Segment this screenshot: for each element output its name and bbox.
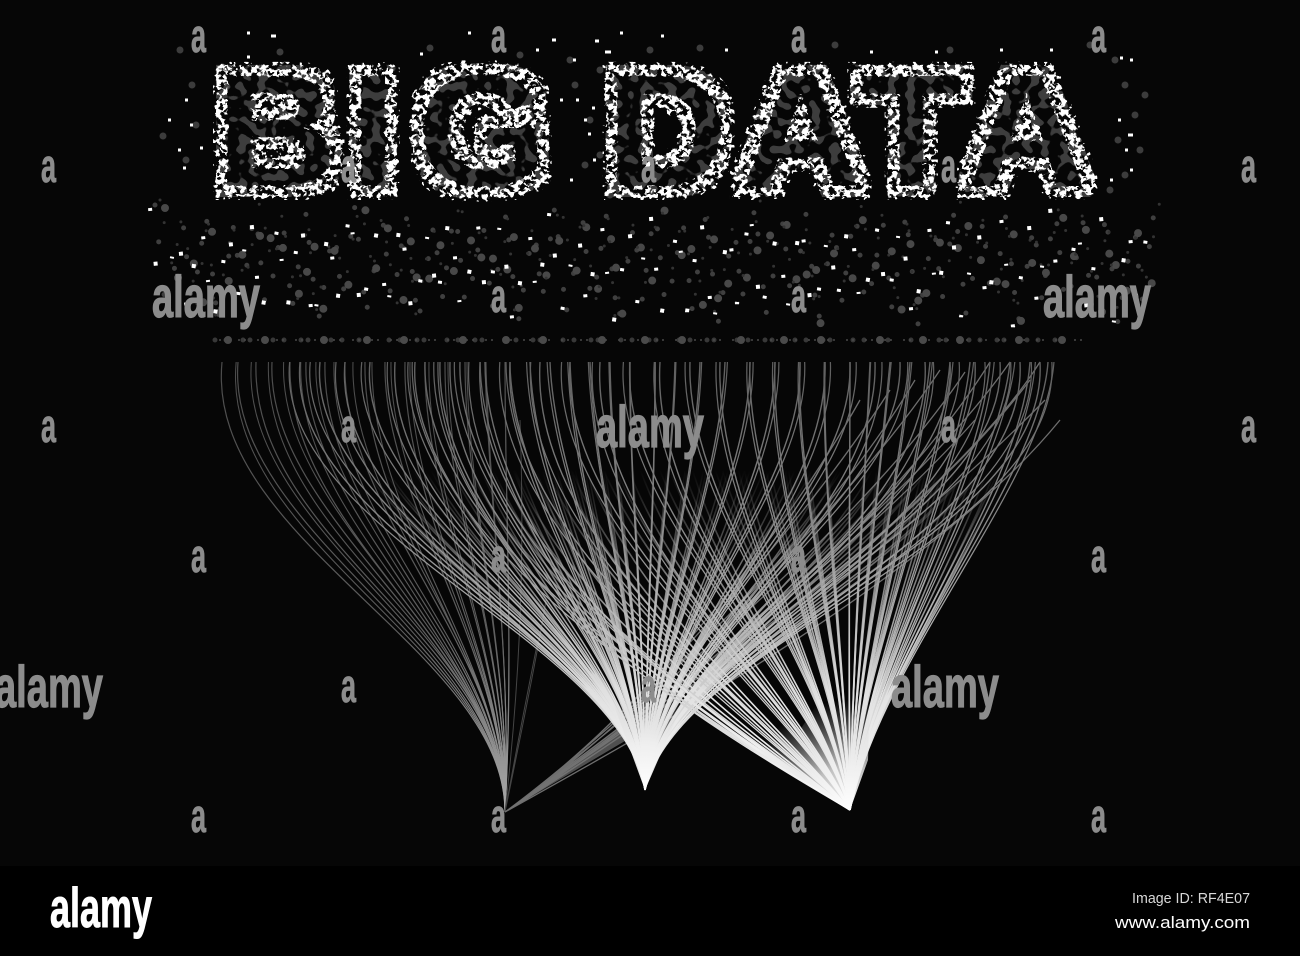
scattered white particles <box>150 33 1150 327</box>
watermark: small marks: a <box>791 269 806 322</box>
watermark: small marks: a <box>941 399 956 452</box>
watermark: small marks: a <box>791 789 806 842</box>
watermark: small marks: a <box>491 789 506 842</box>
watermark: small marks: a <box>641 659 656 712</box>
fan C: bright lower copies <box>476 478 1003 811</box>
watermark: small marks: a <box>1091 9 1106 62</box>
watermark: small marks: a <box>41 139 56 192</box>
fan C: full-height copy <box>412 362 1054 810</box>
bright tip: centre <box>618 698 680 786</box>
curve network: fibres converging to three points <box>221 362 1060 812</box>
watermark: small marks: a <box>191 529 206 582</box>
band: grey wedge from left tip <box>530 730 624 798</box>
watermark: small marks: a <box>941 139 956 192</box>
watermark: small marks: a <box>791 9 806 62</box>
fan B: full-height copy <box>289 362 1052 790</box>
footer logo: alamy <box>50 876 152 939</box>
dotted divider line of particles <box>215 338 1085 342</box>
watermark: small marks: a <box>1241 399 1256 452</box>
fan A: dim curves into left tip <box>221 362 509 812</box>
band: left tip rising to upper right <box>505 362 1060 812</box>
watermark: small marks: a <box>791 529 806 582</box>
watermark: small marks: a <box>41 399 56 452</box>
watermark: large logos <box>0 265 1151 720</box>
website: www.alamy.com <box>1114 913 1250 932</box>
watermark: small marks: a <box>341 399 356 452</box>
fan B: curves into centre tip <box>300 362 1040 790</box>
bright tip: right <box>765 704 869 804</box>
fan B: bright lower copies <box>358 475 977 790</box>
watermark: small marks: a <box>341 659 356 712</box>
watermark: large logos: alamy <box>1043 265 1151 330</box>
watermark: small marks: a <box>1091 529 1106 582</box>
watermark: large logos: alamy <box>152 265 260 330</box>
watermark: large logos: alamy <box>891 655 999 720</box>
watermark: small marks: a <box>1091 789 1106 842</box>
watermark: small marks: a <box>491 269 506 322</box>
fan C: curves into right tip <box>425 362 1048 810</box>
image id: Image ID: RF4E07 <box>1132 890 1250 907</box>
title: BIG DATA: BIG DATA <box>216 41 1087 220</box>
fan A: faint short fibres <box>505 420 546 812</box>
footer bar <box>0 866 1300 956</box>
scattered grey particles <box>155 45 1165 326</box>
watermark: small marks: a <box>491 9 506 62</box>
watermark: small marks: a <box>491 529 506 582</box>
watermark: small marks: a <box>1241 139 1256 192</box>
watermark: small marks: a <box>191 789 206 842</box>
watermark: small marks: a <box>341 139 356 192</box>
watermark: small marks: a <box>641 139 656 192</box>
watermark: small marks: a <box>191 9 206 62</box>
fan A: density copy <box>235 362 509 812</box>
watermark: large logos: alamy <box>596 395 704 460</box>
